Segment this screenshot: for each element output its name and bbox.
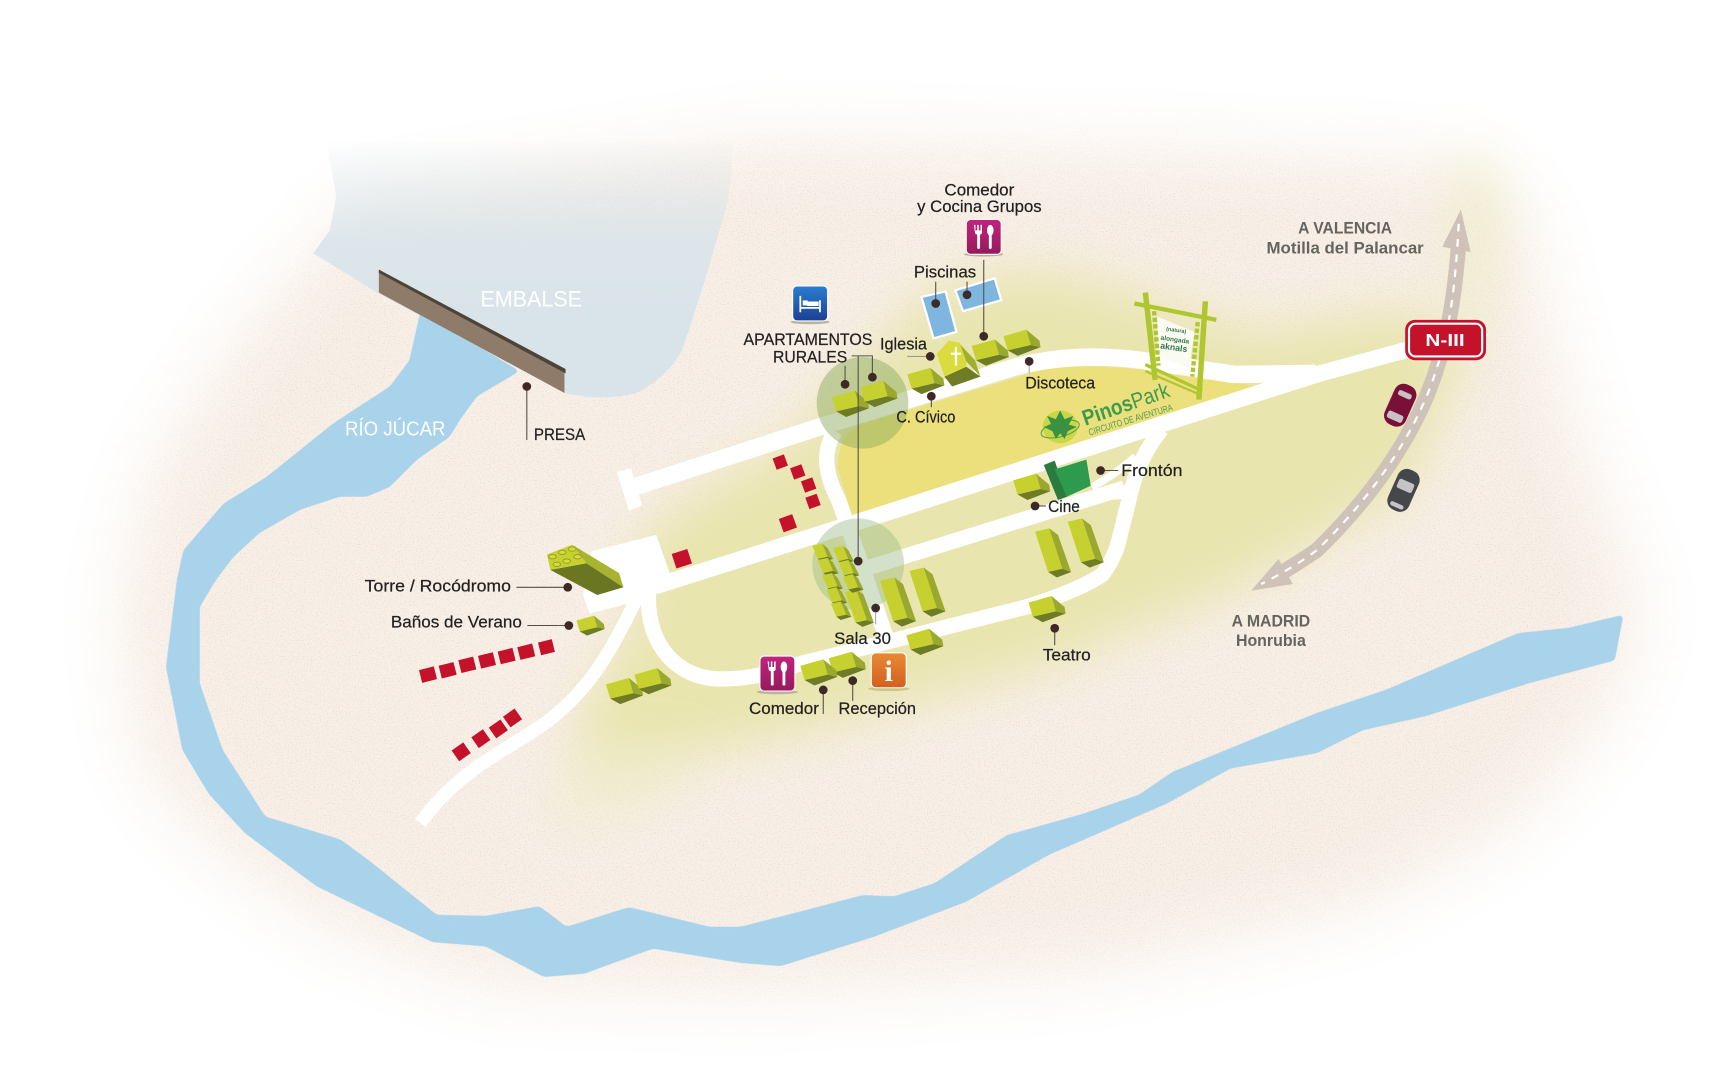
labels: RURALES	[773, 347, 847, 366]
labels: Torre / Rocódromo	[365, 577, 511, 596]
logo: PinosPark: CIRCUITO DE AVENTURA	[1087, 402, 1174, 437]
entrance gate sign	[1134, 293, 1216, 400]
labels: y Cocina Grupos	[917, 197, 1042, 216]
building: Iglesia	[937, 341, 980, 386]
reservoir: Embalse	[313, 142, 734, 397]
logo emblem: palm	[1039, 410, 1081, 443]
red minor buildings	[419, 454, 821, 761]
leader lines	[516, 260, 1118, 714]
road sign: N-III	[1405, 320, 1486, 360]
highway N-III	[1251, 210, 1471, 591]
pools: Piscinas	[922, 278, 1001, 338]
road sign: N-III: N-III	[1425, 330, 1465, 350]
icon: restaurant (Comedor)	[757, 656, 798, 694]
labels: Frontón	[1121, 461, 1182, 480]
dam: Presa	[379, 270, 566, 393]
labels: C. Cívico	[896, 407, 955, 426]
labels: APARTAMENTOS	[744, 330, 872, 349]
labels: Discoteca	[1025, 374, 1096, 393]
labels: EMBALSE	[480, 287, 582, 312]
building: Torre / Rocódromo	[547, 545, 623, 595]
marker dots	[522, 290, 1105, 694]
green circles: highlighted apartment zones	[812, 357, 908, 610]
labels: Iglesia	[880, 334, 928, 353]
building: Frontón	[1044, 460, 1091, 500]
labels: Motilla del Palancar	[1267, 239, 1424, 257]
labels: A VALENCIA	[1298, 220, 1392, 238]
green-yellow land zone	[546, 153, 1498, 824]
labels: Teatro	[1043, 645, 1091, 664]
icon: grey car	[1384, 466, 1423, 515]
entrance gate sign: aknals	[1160, 341, 1188, 354]
labels: Honrubia	[1236, 632, 1307, 650]
entrance gate sign: alongada	[1160, 335, 1190, 346]
logo: PinosPark	[1039, 377, 1174, 443]
background: paper	[92, 106, 1666, 1026]
river: Río Júcar	[166, 311, 1624, 977]
labels	[345, 180, 1424, 718]
white roads	[420, 349, 1408, 823]
labels: Baños de Verano	[391, 613, 522, 632]
labels: Comedor	[944, 180, 1015, 199]
labels: Comedor	[749, 699, 819, 718]
icon: red car	[1381, 381, 1420, 430]
labels: RÍO JÚCAR	[345, 418, 445, 441]
map: infographic canvas	[92, 106, 1666, 1026]
icon: information	[868, 653, 910, 691]
labels: PRESA	[534, 425, 586, 444]
icon: information: i	[885, 656, 893, 688]
labels: Recepción	[839, 699, 916, 718]
entrance gate sign: (natura)	[1166, 327, 1187, 335]
labels: Cine	[1048, 497, 1080, 516]
icon: bed (Apartamentos)	[790, 286, 830, 324]
icon: restaurant (Comedor y Cocina Grupos)	[964, 219, 1003, 257]
labels: Piscinas	[914, 262, 976, 281]
labels: Sala 30	[834, 629, 891, 648]
labels: A MADRID	[1232, 613, 1310, 631]
logo: PinosPark: PinosPark	[1079, 377, 1173, 430]
plaza: yellow central field	[837, 366, 1259, 515]
buildings: green blocks	[576, 330, 1104, 704]
